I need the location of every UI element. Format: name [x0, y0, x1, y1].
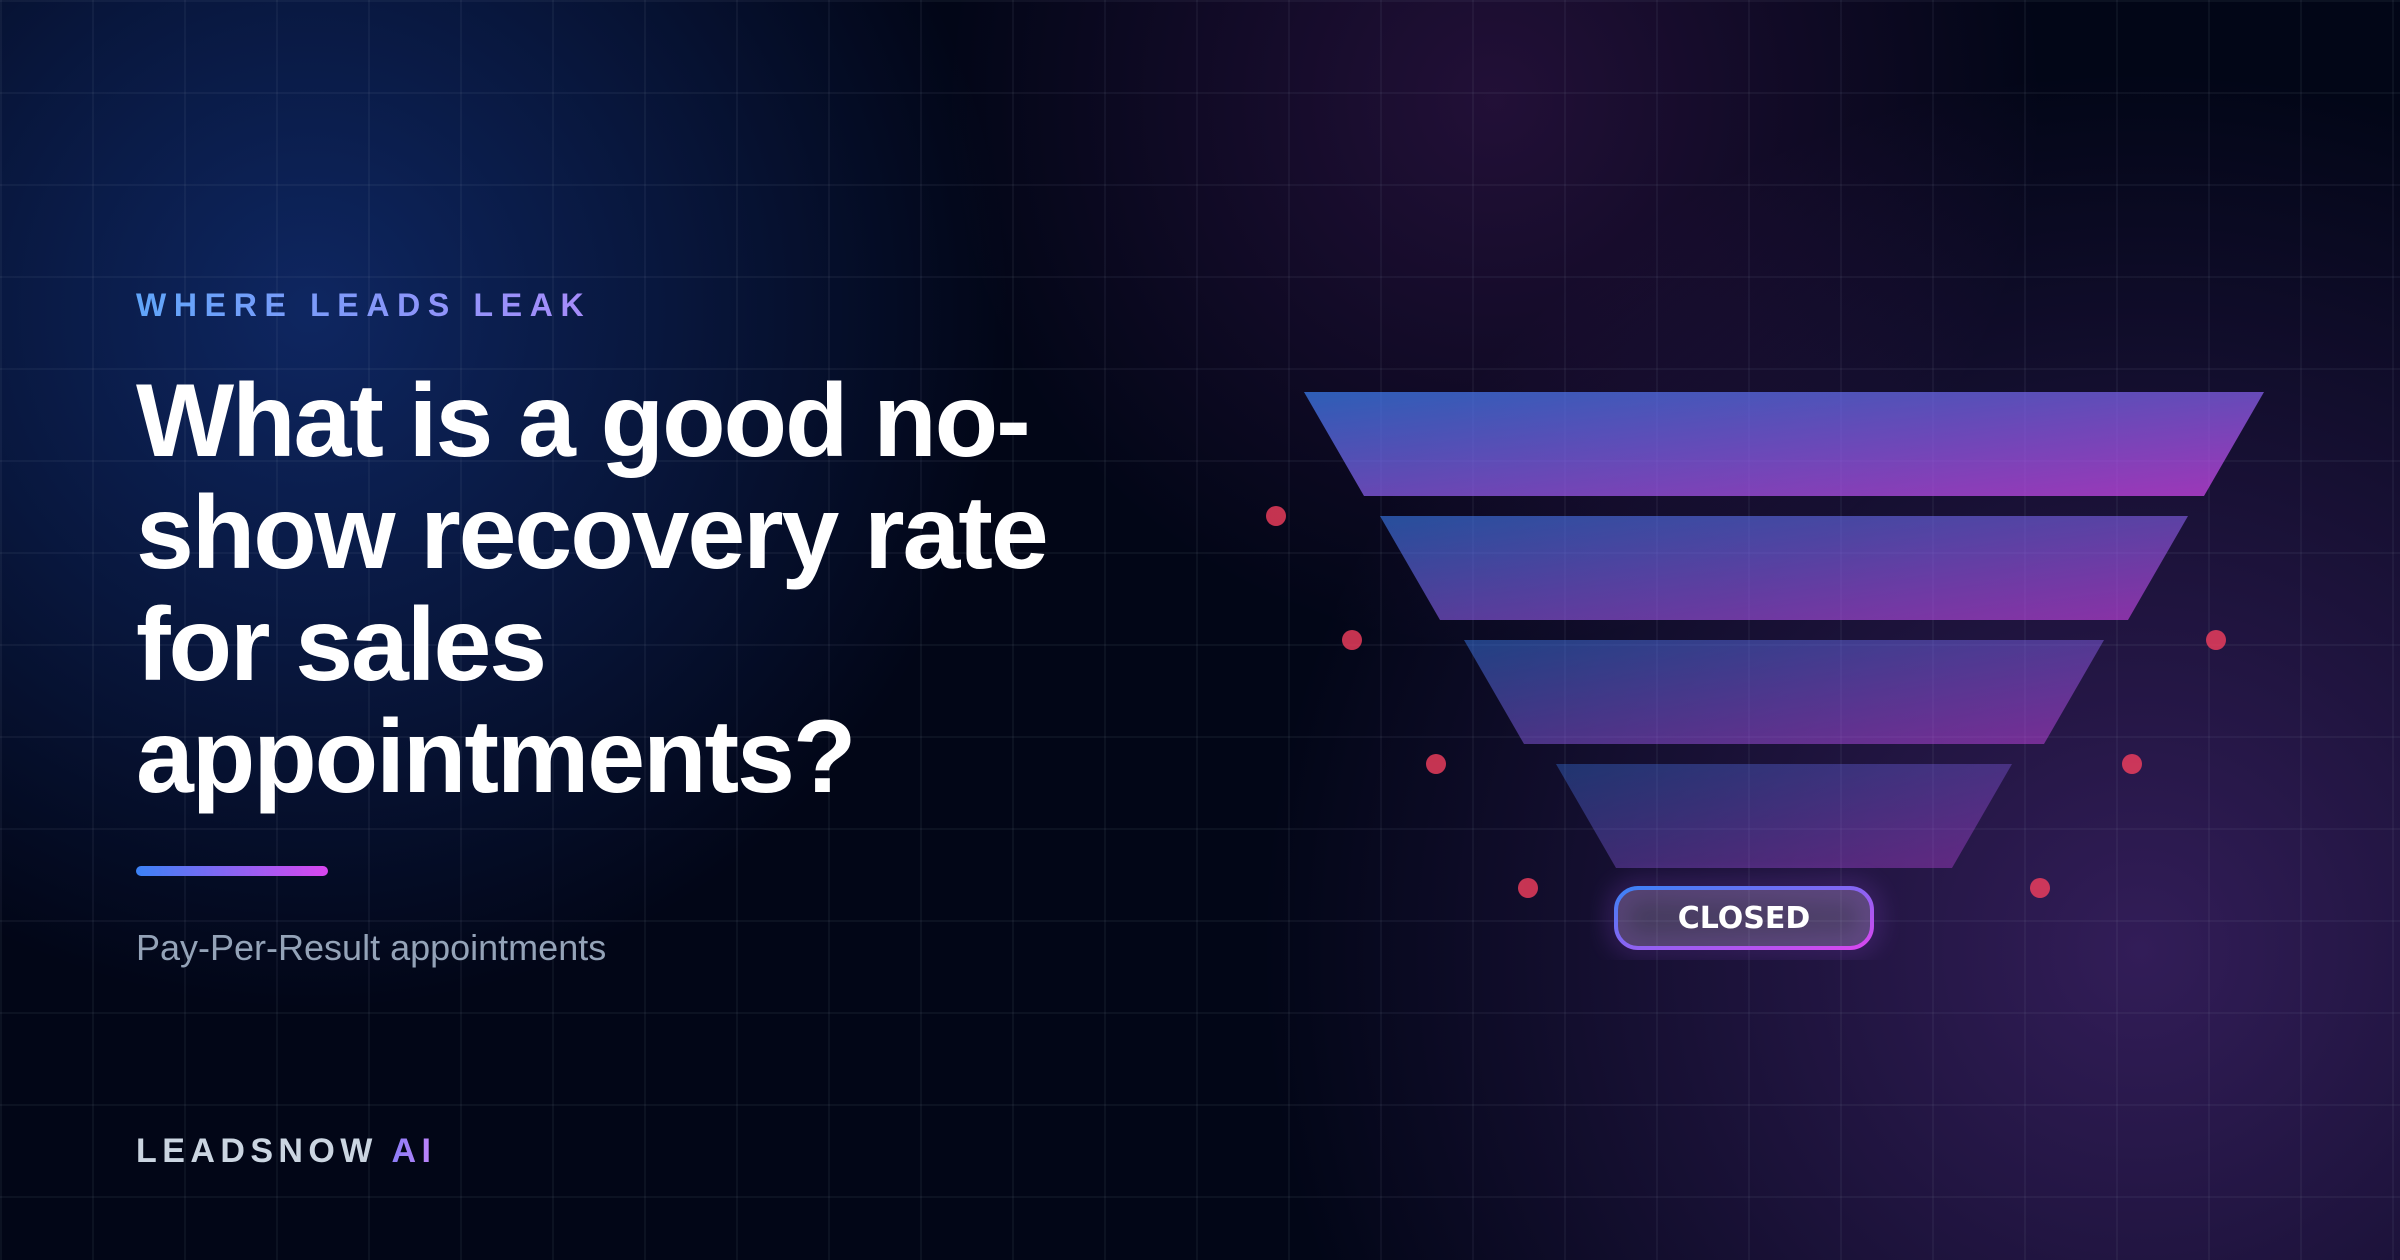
accent bar — [136, 866, 328, 876]
leak dots — [1266, 506, 2226, 898]
funnel stage 3 — [1464, 640, 2104, 744]
funnel — [1304, 392, 2264, 868]
subtitle: Pay-Per-Result appointments — [136, 927, 606, 968]
funnel stage 1 — [1304, 392, 2264, 496]
eyebrow: where leads leak: WHERE LEADS LEAK — [136, 287, 591, 323]
title: show recovery rate — [136, 475, 1047, 591]
closed label: CLOSED — [1678, 901, 1810, 936]
title: appointments? — [136, 699, 854, 815]
title: for sales — [136, 587, 545, 703]
brand: LeadsNow AI: LEADSNOW AI — [136, 1132, 436, 1170]
funnel stage 2 — [1380, 516, 2188, 620]
funnel stage 4 — [1556, 764, 2012, 868]
title: What is a good no- — [136, 363, 1029, 479]
closed pill — [1616, 888, 1872, 948]
